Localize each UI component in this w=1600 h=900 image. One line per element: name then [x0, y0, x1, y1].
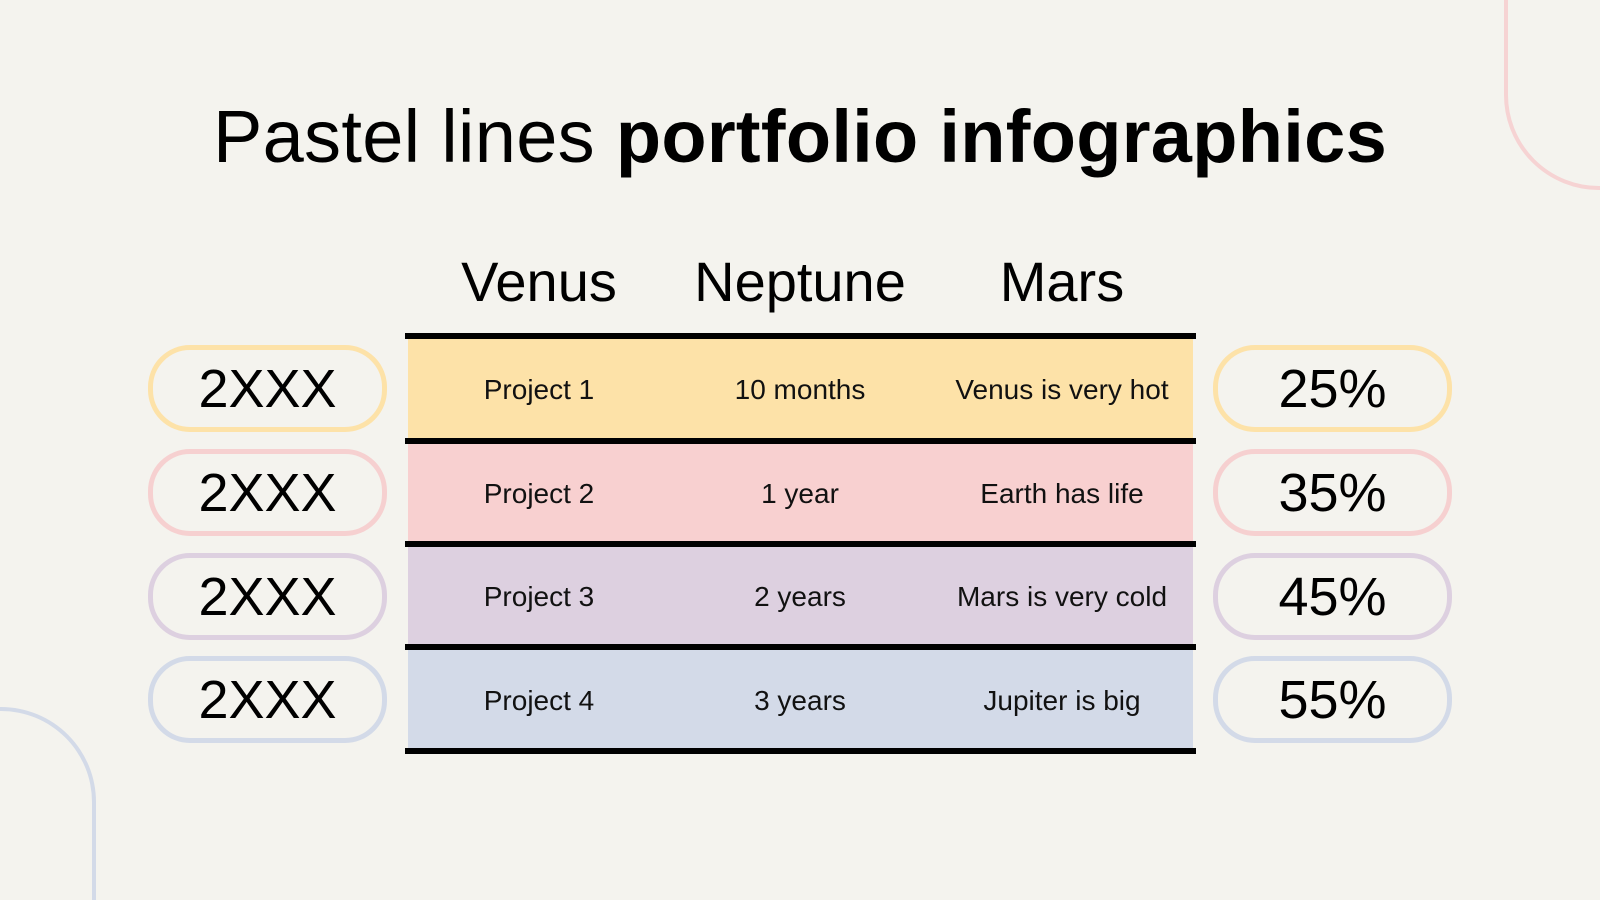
- pill: 2XXX 1: [148, 345, 387, 432]
- row 4: [408, 650, 1193, 751]
- pill: 2XXX 4: 2XXX: [198, 670, 337, 730]
- decoration: top right arc: [1504, 0, 1600, 190]
- row 2: 1 year: [761, 478, 839, 509]
- pill: 35%: [1213, 449, 1452, 536]
- pill: 2XXX 4: [148, 656, 387, 743]
- pill: 45%: [1213, 553, 1452, 640]
- row 1: Project 1: [484, 374, 594, 405]
- header: Venus: Venus: [461, 250, 617, 313]
- pill: 2XXX 2: [148, 449, 387, 536]
- row 4: Project 4: [484, 684, 594, 716]
- row 4: Jupiter is big: [983, 684, 1141, 716]
- row 3: 2 years: [754, 581, 846, 612]
- header: Mars: Mars: [1000, 250, 1124, 313]
- year pills: [148, 345, 387, 743]
- row 1: 10 months: [735, 374, 865, 405]
- row 1: [408, 339, 1193, 441]
- pill: 45%: 45%: [1278, 566, 1387, 626]
- row 2: [408, 444, 1193, 544]
- pill: 35%: 35%: [1278, 462, 1387, 522]
- pill: 2XXX 2: 2XXX: [198, 462, 337, 522]
- column headers: [461, 250, 1124, 313]
- row 2: Project 2: [484, 478, 594, 509]
- title: Pastel lines portfolio infographics: [213, 95, 1387, 178]
- row 4: 3 years: [754, 684, 846, 716]
- header: Neptune: Neptune: [694, 250, 906, 313]
- pill: 25%: 25%: [1278, 358, 1387, 418]
- row 1: Venus is very hot: [955, 374, 1169, 405]
- pill: 2XXX 3: 2XXX: [198, 566, 337, 626]
- row 3: [408, 547, 1193, 647]
- pill: 2XXX 3: [148, 553, 387, 640]
- row 2: Earth has life: [980, 478, 1144, 509]
- pill: 25%: [1213, 345, 1452, 432]
- decoration: bottom left arc: [0, 707, 96, 900]
- row 3: Mars is very cold: [957, 581, 1167, 612]
- pill: 2XXX 1: 2XXX: [198, 358, 337, 418]
- percentage pills: [1213, 345, 1452, 743]
- pill: 55%: [1213, 656, 1452, 743]
- pill: 55%: 55%: [1278, 670, 1387, 730]
- row 3: Project 3: [484, 581, 594, 612]
